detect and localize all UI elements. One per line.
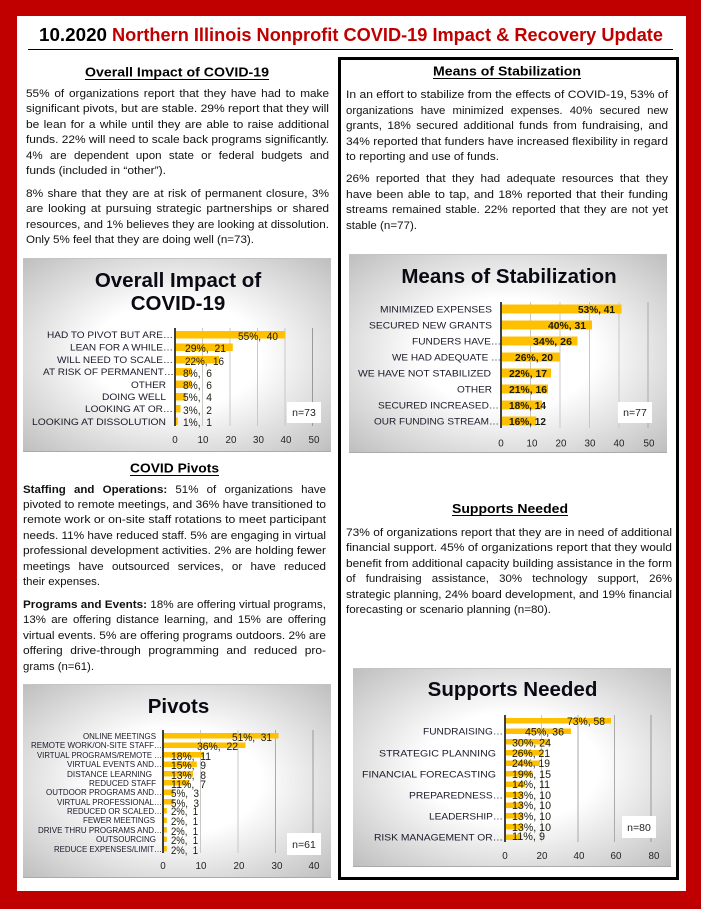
axis tick labels: 30	[585, 438, 596, 450]
data labels: 53%, 41	[578, 305, 615, 316]
category labels: PREPAREDNESS…	[409, 790, 503, 800]
text block: overall impact: resources, and 1% believes they are looking at dissolution.	[26, 219, 329, 231]
heading: COVID Pivots: COVID Pivots	[130, 460, 219, 476]
category labels	[31, 732, 162, 854]
category labels: LOOKING AT DISSOLUTION	[32, 417, 166, 427]
data labels: 51%, 31	[232, 732, 272, 744]
text block: covid pivots: remote work or on-site staff rotations to meet participant	[23, 514, 327, 526]
chart: Supports Needed	[353, 668, 671, 867]
category labels: SECURED NEW GRANTS	[369, 320, 492, 330]
text block: covid pivots: needs. 11% have reduced staff. 5% are engaging in virtual	[23, 530, 326, 542]
text block: overall impact: funds (included in “other”).	[26, 165, 166, 177]
text block: means of stabilization	[346, 89, 669, 232]
text block: supports needed: forecasting or scenario planning (n=80).	[346, 604, 551, 616]
text block: covid pivots: 13% are offering distance learning, and 15% are offering	[23, 614, 326, 626]
axis tick labels: 0	[502, 851, 508, 862]
axis tick labels: 10	[196, 861, 207, 872]
data labels: 30%, 24	[512, 738, 551, 750]
category labels: VIRTUAL PROFESSIONAL…	[57, 798, 162, 807]
text block: supports needed: benefit from additional capacity building assistance in the form	[346, 558, 672, 570]
sample size callout	[618, 402, 652, 423]
category labels: SECURED INCREASED…	[378, 400, 499, 410]
panel: right column outline	[340, 58, 678, 878]
bars	[163, 733, 278, 852]
data labels: 13%, 10	[512, 811, 551, 823]
data labels: 2%, 1	[171, 826, 198, 838]
data labels: 18%, 11	[171, 751, 211, 763]
text block: overall impact: 8% share that they are at risk of permanent closure, 3%	[26, 188, 329, 200]
data labels	[509, 305, 615, 428]
text block: means of stabilization: grants, 18% secured additional funds from fundraising, and	[346, 120, 668, 132]
data labels: 36%, 22	[197, 741, 238, 753]
category labels	[32, 330, 174, 427]
sample size callout: n=73	[292, 407, 316, 419]
data labels: 3%, 2	[183, 405, 212, 417]
sample size callout	[287, 833, 321, 855]
text block: supports needed: 73% of organizations report that they are in need of additional	[346, 527, 672, 539]
category labels: DOING WELL	[102, 392, 166, 402]
sample size callout: n=80	[627, 822, 651, 834]
text block: covid pivots: pivoted to remote meetings, and 36% have transitioned to	[23, 499, 326, 511]
category labels: STRATEGIC PLANNING	[379, 748, 496, 758]
text block: supports needed: strategic planning, 24% board development, and 19% financial	[346, 589, 672, 601]
data labels: 2%, 1	[171, 845, 198, 857]
category labels: REDUCED STAFF	[89, 779, 156, 788]
axis tick labels: 40	[614, 438, 625, 450]
category labels: HAD TO PIVOT BUT ARE…	[47, 330, 173, 340]
category labels: DRIVE THRU PROGRAMS AND…	[38, 826, 162, 835]
text block: overall impact: 55% of organizations report that they have had to make	[26, 88, 329, 100]
text block: covid pivots: offering drive-through programming and reduced pro-	[23, 645, 326, 657]
category labels: OTHER	[457, 384, 493, 394]
text block: covid pivots	[23, 484, 327, 673]
axis tick labels	[172, 435, 320, 446]
category labels: LEAN FOR A WHILE…	[70, 342, 173, 352]
axis tick labels: 0	[172, 435, 178, 446]
text block: overall impact: are looking at pursuing strategic partnerships or shared	[26, 203, 329, 215]
category labels: WILL NEED TO SCALE…	[57, 355, 173, 365]
text block: covid pivots: virtual events. 5% are offering programs outdoors. 2% are	[23, 630, 326, 642]
data labels: 26%, 21	[512, 748, 550, 760]
category labels: WE HAD ADEQUATE …	[392, 352, 501, 362]
data labels: 5%, 4	[183, 392, 212, 404]
data labels: 5%, 3	[171, 798, 199, 810]
category labels: FEWER MEETINGS	[83, 816, 155, 825]
axis tick labels: 30	[253, 435, 264, 446]
data labels: 22%, 16	[185, 356, 224, 368]
text block: covid pivots: their expenses.	[23, 576, 100, 588]
chart title	[95, 269, 261, 315]
bars	[505, 718, 611, 840]
title: Northern Illinois Nonprofit COVID-19 Impact & Recovery Update	[112, 25, 663, 45]
text block: supports needed: financial support. 45% of organizations report that they would	[346, 542, 672, 554]
category labels: DISTANCE LEARNING	[67, 770, 152, 779]
sample size callout: n=61	[292, 839, 316, 851]
text block: covid pivots: meetings have outsourced services, or have reduced	[23, 561, 326, 573]
data labels: 13%, 10	[512, 800, 551, 812]
text block: overall impact: funds. 22% will need to scale back programs significantly.	[26, 134, 329, 146]
axis tick labels: 10	[527, 438, 538, 450]
axis tick labels: 20	[226, 435, 237, 446]
category labels	[362, 726, 503, 842]
data labels: 13%, 10	[512, 822, 551, 834]
data labels: 1%, 1	[183, 417, 212, 429]
data labels: 2%, 1	[171, 816, 198, 828]
category labels: REDUCED OR SCALED…	[67, 807, 162, 816]
category labels: FUNDRAISING…	[423, 726, 503, 736]
category labels: FINANCIAL FORECASTING	[362, 768, 496, 780]
category labels: AT RISK OF PERMANENT…	[43, 367, 174, 377]
data labels: 24%, 19	[512, 758, 550, 770]
axis tick labels	[160, 861, 320, 872]
heading: Means of Stabilization: Means of Stabilization	[433, 64, 581, 78]
category labels: RISK MANAGEMENT OR…	[374, 832, 503, 842]
data labels	[183, 331, 278, 429]
data labels: 8%, 6	[183, 380, 212, 392]
axis tick labels: 40	[281, 435, 292, 446]
sample size callout	[287, 402, 321, 423]
text block: overall impact: be lean for a while until they are able to raise additional	[26, 119, 329, 131]
data labels: 16%, 12	[509, 417, 546, 428]
data labels: 5%, 3	[171, 788, 199, 800]
axis tick labels: 30	[272, 861, 283, 872]
sample size callout	[622, 816, 656, 838]
text block: overall impact	[26, 88, 329, 246]
text block: supports needed: of fundraising assistance, 30% technology support, 26%	[346, 573, 672, 585]
axis tick labels	[498, 438, 655, 450]
axis tick labels: 50	[644, 438, 655, 450]
axis tick labels: 0	[498, 438, 504, 450]
category labels: OUTDOOR PROGRAMS AND…	[46, 788, 162, 797]
axis tick labels: 0	[160, 861, 166, 872]
data labels: 34%, 26	[533, 337, 572, 348]
chart: Means of Stabilization	[349, 254, 667, 453]
category labels: ONLINE MEETINGS	[83, 732, 156, 741]
data labels: 15%, 9	[171, 760, 206, 772]
category labels: VIRTUAL EVENTS AND…	[67, 760, 162, 769]
text block: means of stabilization: 34% reported that funders have increased flexibility in regard	[346, 136, 668, 148]
data labels	[512, 716, 605, 843]
data labels: 2%, 1	[171, 806, 198, 818]
bars	[501, 304, 622, 426]
data labels: 14%, 11	[512, 779, 550, 791]
category labels: OUR FUNDING STREAM…	[374, 416, 499, 426]
sample size callout: n=77	[623, 407, 647, 419]
text block: means of stabilization: stable (n=77).	[346, 220, 417, 232]
category labels: LEADERSHIP…	[429, 810, 503, 822]
text block: overall impact: significant pivots, but are stable. 29% report that they will	[26, 103, 329, 115]
category labels: WE HAVE NOT STABILIZED	[358, 368, 492, 378]
heading: Overall Impact of COVID-19: Overall Impact of COVID-19	[85, 64, 269, 80]
data labels: 19%, 15	[512, 769, 551, 781]
axis tick labels: 10	[198, 435, 209, 446]
data labels: 21%, 16	[509, 385, 547, 396]
data labels	[171, 732, 272, 857]
data labels: 11%, 9	[512, 831, 545, 843]
heading: Supports Needed: Supports Needed	[452, 501, 568, 516]
axis tick labels: 20	[556, 438, 567, 450]
data labels: 13%, 10	[512, 790, 551, 802]
title: 10.2020	[39, 25, 107, 45]
chart title: Pivots	[148, 695, 209, 718]
category labels: LOOKING AT OR…	[85, 404, 173, 414]
data labels: 8%, 6	[183, 368, 212, 380]
text block: means of stabilization: to reporting and use of funds.	[346, 151, 499, 163]
category labels: REDUCE EXPENSES/LIMIT…	[54, 845, 162, 854]
category labels	[358, 304, 501, 426]
data labels: 13%, 8	[171, 770, 206, 782]
text block: covid pivots: Staffing and Operations: 51% of organizations have	[23, 484, 326, 496]
text block: means of stabilization: have been able to tap, and 18% reported that their funding	[346, 189, 668, 201]
axis tick labels: 40	[574, 851, 585, 862]
chart title: Means of Stabilization	[401, 265, 617, 288]
text block: overall impact: Only 5% feel that they are doing well (n=73).	[26, 234, 254, 246]
data labels: 26%, 20	[515, 353, 553, 364]
data labels: 22%, 17	[509, 369, 547, 380]
data labels: 2%, 1	[171, 835, 198, 847]
category labels: REMOTE WORK/ON-SITE STAFF…	[31, 741, 162, 750]
axis tick labels: 80	[649, 851, 660, 862]
axis tick labels: 40	[309, 861, 320, 872]
data labels: 11%, 7	[171, 779, 206, 791]
text block: supports needed	[346, 527, 672, 616]
axis tick labels: 20	[234, 861, 245, 872]
data labels: 73%, 58	[567, 716, 605, 728]
chart: Pivots	[23, 684, 331, 878]
chart: Overall Impact of COVID-19	[23, 258, 331, 452]
chart title: Overall Impact of	[95, 269, 261, 292]
category labels: FUNDERS HAVE…	[412, 336, 501, 346]
axis tick labels	[502, 851, 660, 862]
data labels: 18%, 14	[509, 401, 546, 412]
category labels: VIRTUAL PROGRAMS/REMOTE …	[37, 751, 162, 760]
axis tick labels: 60	[611, 851, 622, 862]
data labels: 40%, 31	[548, 321, 586, 332]
text block: means of stabilization: 26% reported that they had adequate resources that they	[346, 173, 668, 185]
text block: means of stabilization: streams remained stable. 22% reported that they are not yet	[346, 204, 669, 216]
axis tick labels: 50	[309, 435, 320, 446]
data labels: 55%, 40	[238, 331, 278, 343]
category labels: MINIMIZED EXPENSES	[380, 304, 492, 314]
text block: covid pivots: professional development activities. 2% are holding fewer	[23, 545, 326, 557]
chart title: Supports Needed	[428, 678, 597, 701]
chart title: COVID-19	[131, 292, 225, 315]
text block: overall impact: 4% are dependent upon state or federal budgets and	[26, 150, 329, 162]
category labels: OUTSOURCING	[96, 835, 156, 844]
data labels: 45%, 36	[525, 726, 564, 738]
text block: means of stabilization: In an effort to stabilize from the effects of COVID-19, 53% of	[346, 89, 669, 101]
text block: covid pivots: Programs and Events: 18% are offering virtual programs,	[23, 599, 326, 611]
bars	[175, 331, 285, 425]
data labels: 29%, 21	[185, 343, 226, 355]
axis tick labels: 20	[537, 851, 548, 862]
text block: means of stabilization: organizations have minimized expenses. 40% secured new	[346, 105, 669, 117]
text block: covid pivots: grams (n=61).	[23, 661, 94, 673]
category labels: OTHER	[131, 380, 167, 390]
